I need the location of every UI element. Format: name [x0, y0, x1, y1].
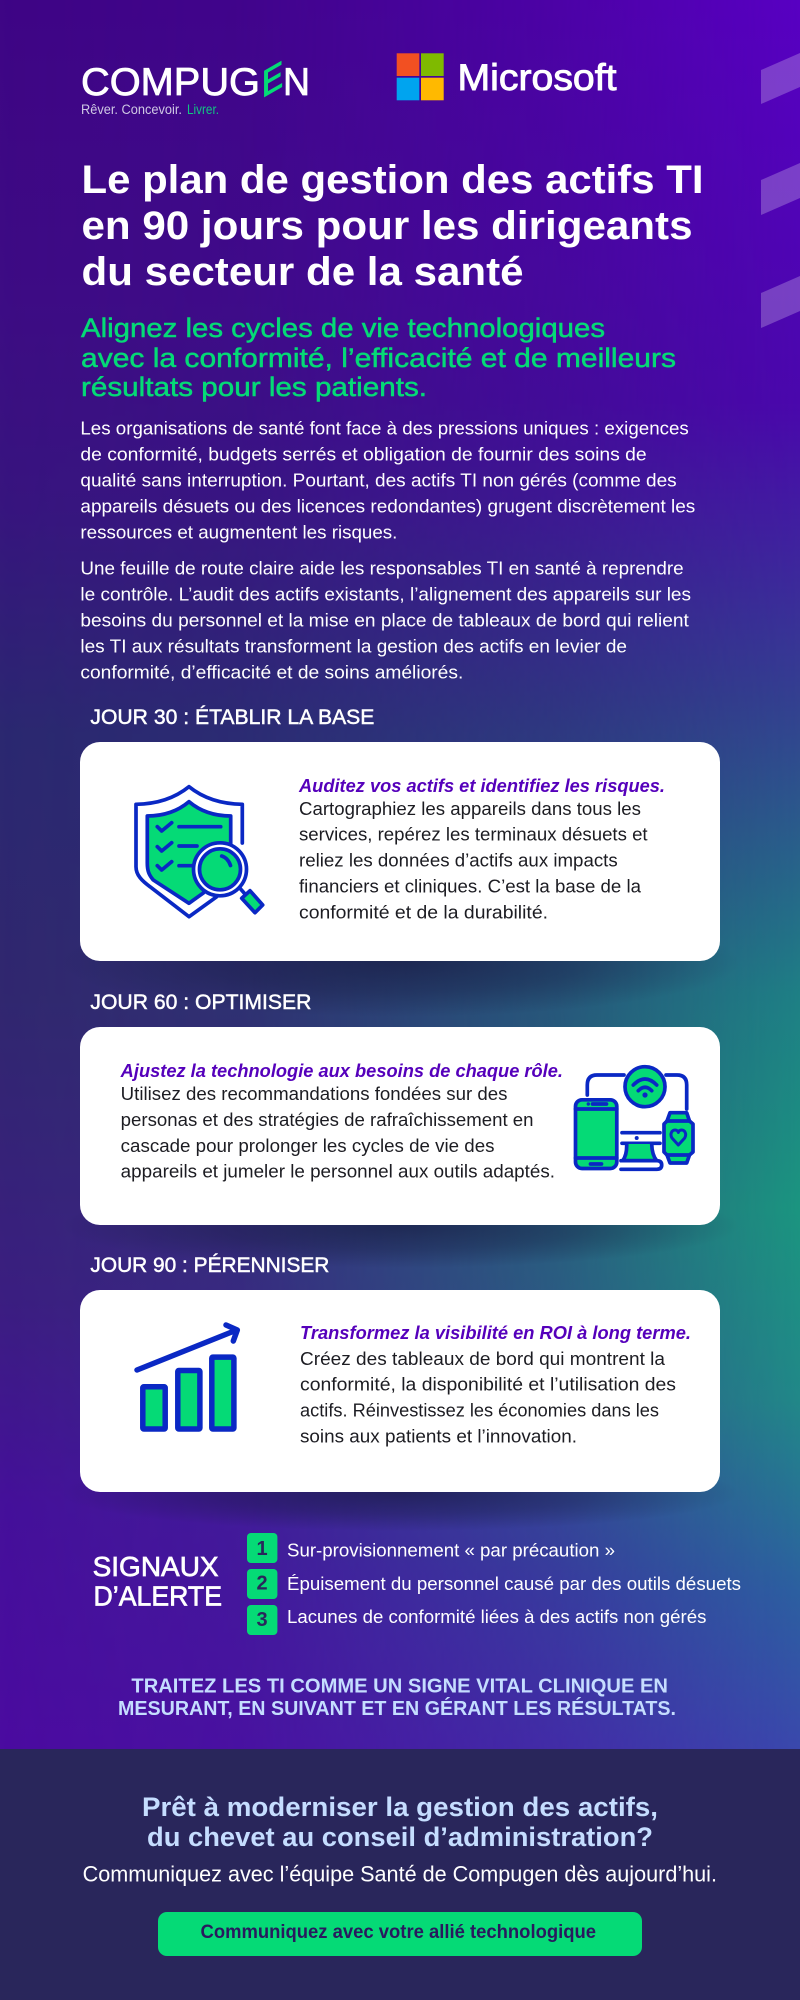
intro paragraph 2: les TI aux résultats transforment la gestion des actifs en levier de	[80, 636, 627, 656]
text: day 60: personas et des stratégies de rafraîchissement en	[121, 1110, 533, 1130]
panel: day 60	[80, 1027, 720, 1225]
title: du secteur de la santé	[82, 250, 524, 294]
title: Le plan de gestion des actifs TI	[82, 158, 704, 202]
text: day 60: Utilisez des recommandations fondées sur des	[121, 1084, 507, 1104]
warning signs list: 3	[256, 1609, 268, 1631]
warning signs list: 2	[256, 1572, 268, 1594]
footer text: Communiquez avec l’équipe Santé de Compugen dès aujourd’hui.	[83, 1862, 717, 1887]
warning signs list	[247, 1533, 741, 1635]
text: day 90: conformité, la disponibilité et l’utilisation des	[300, 1375, 676, 1395]
text: day 30: conformité et de la durabilité.	[299, 903, 548, 923]
intro paragraph 1: Les organisations de santé font face à des pressions uniques : exigences	[80, 418, 689, 438]
heading: day 30: JOUR 30 : ÉTABLIR LA BASE	[90, 704, 374, 729]
title	[82, 158, 704, 294]
panel: day 90	[80, 1290, 720, 1492]
footer heading: Prêt à moderniser la gestion des actifs,	[142, 1792, 658, 1822]
intro paragraph 1: qualité sans interruption. Pourtant, des actifs TI non gérés (comme des	[80, 470, 677, 490]
intro paragraph 1: ressources et augmentent les risques.	[80, 522, 397, 542]
logo: Microsoft	[397, 53, 617, 100]
decorative chevrons	[761, 53, 800, 328]
intro paragraph 2: conformité, d’efficacité et de soins améliorés.	[80, 662, 463, 682]
logo: Compugen: E	[262, 53, 283, 106]
warning signs list: 1	[256, 1538, 268, 1560]
footer band	[0, 1749, 800, 2000]
button	[158, 1912, 642, 1956]
callout: treat IT as a vital sign: MESURANT, EN SUIVANT ET EN GÉRANT LES RÉSULTATS.	[118, 1697, 676, 1720]
text: day 90: soins aux patients et l’innovation.	[300, 1427, 577, 1447]
heading: warning signs	[93, 1551, 222, 1612]
text: day 30: financiers et cliniques. C’est la base de la	[299, 877, 642, 897]
footer heading	[142, 1792, 658, 1852]
subtitle: résultats pour les patients.	[81, 372, 427, 402]
text: day 90: actifs. Réinvestissez les économies dans les	[300, 1401, 659, 1421]
card shadow: day 30	[60, 907, 740, 1017]
logo: Microsoft: Microsoft	[458, 57, 617, 98]
logo: Compugen: Livrer.	[187, 102, 219, 117]
button: Communiquez avec votre allié technologique	[200, 1922, 596, 1943]
subtitle: Alignez les cycles de vie technologiques	[81, 313, 605, 343]
text: day 90: Créez des tableaux de bord qui montrent la	[300, 1349, 666, 1369]
logo: Compugen: N	[283, 61, 310, 104]
text: day 60	[120, 1061, 563, 1182]
text: day 30: Auditez vos actifs et identifiez les risques.	[298, 776, 665, 796]
panel: day 30	[80, 742, 720, 961]
intro paragraph 2	[80, 558, 691, 682]
warning signs list: Lacunes de conformité liées à des actifs non gérés	[287, 1606, 706, 1627]
heading: warning signs: SIGNAUX	[93, 1551, 219, 1582]
intro paragraph 2: Une feuille de route claire aide les responsables TI en santé à reprendre	[80, 558, 684, 578]
heading: day 90: JOUR 90 : PÉRENNISER	[90, 1252, 329, 1277]
text: day 30: Cartographiez les appareils dans tous les	[299, 799, 641, 819]
subtitle: avec la conformité, l’efficacité et de meilleurs	[81, 343, 676, 373]
text: day 90	[300, 1323, 691, 1447]
text: day 60: appareils et jumeler le personnel aux outils adaptés.	[121, 1162, 555, 1182]
intro paragraph 1: appareils désuets ou des licences redondantes) grugent discrètement les	[80, 496, 695, 516]
intro paragraph 1: de conformité, budgets serrés et obligation de fournir des soins de	[80, 444, 647, 464]
icon: connected devices	[576, 1067, 693, 1169]
intro paragraph 2: besoins du personnel et la mise en place de tableaux de bord qui relient	[80, 610, 689, 630]
text: day 30: services, repérez les terminaux désuets et	[299, 825, 648, 845]
logo: Compugen: Rêver. Concevoir.	[81, 102, 182, 117]
card shadow: day 90	[60, 1455, 740, 1531]
warning signs list: Épuisement du personnel causé par des outils désuets	[287, 1573, 741, 1594]
text: day 60: cascade pour prolonger les cycles de vie des	[121, 1136, 494, 1156]
logo: Compugen: COMPUG	[81, 61, 260, 104]
callout: treat IT as a vital sign	[118, 1676, 676, 1720]
icon: rising bar chart	[137, 1325, 237, 1429]
text: day 90: Transformez la visibilité en ROI à long terme.	[300, 1323, 691, 1343]
intro paragraph 2: le contrôle. L’audit des actifs existants, l’alignement des appareils sur les	[80, 584, 691, 604]
subtitle	[81, 313, 676, 402]
card shadow: day 60	[60, 1184, 740, 1268]
footer heading: du chevet au conseil d’administration?	[147, 1822, 653, 1852]
icon: shield with magnifier	[136, 787, 263, 917]
text: day 60: Ajustez la technologie aux besoins de chaque rôle.	[120, 1061, 563, 1081]
heading: warning signs: D’ALERTE	[94, 1581, 222, 1612]
logo: Compugen	[81, 53, 310, 117]
text: day 30: reliez les données d’actifs aux impacts	[299, 851, 618, 871]
warning signs list: Sur-provisionnement « par précaution »	[287, 1540, 615, 1561]
callout: treat IT as a vital sign: TRAITEZ LES TI COMME UN SIGNE VITAL CLINIQUE EN	[131, 1676, 668, 1698]
intro paragraph 1	[80, 418, 695, 542]
heading: day 60: JOUR 60 : OPTIMISER	[90, 990, 311, 1014]
title: en 90 jours pour les dirigeants	[82, 204, 692, 248]
text: day 30	[298, 776, 665, 923]
